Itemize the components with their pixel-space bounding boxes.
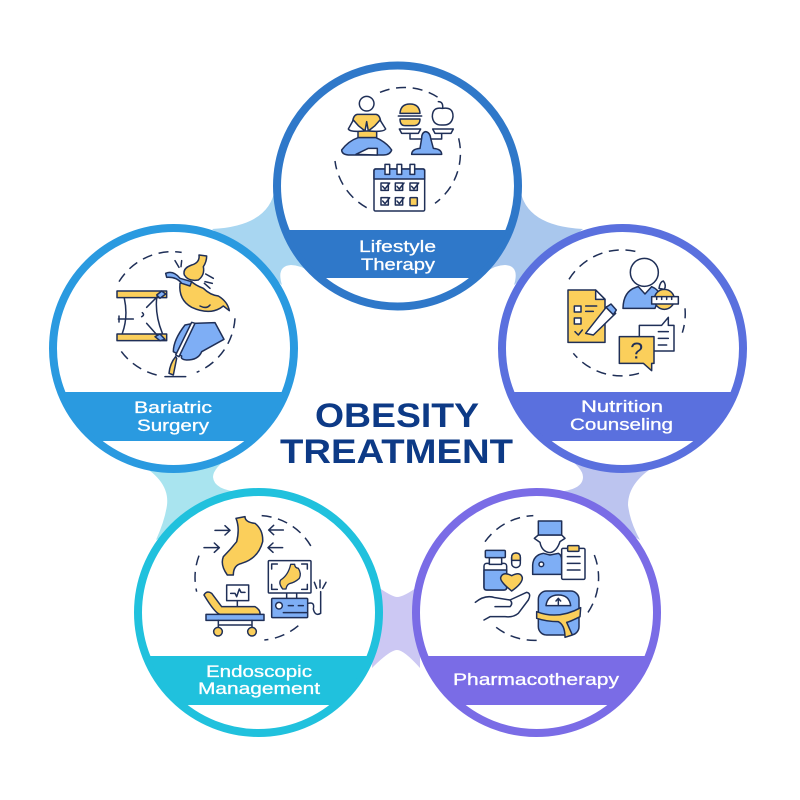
label band: [428, 656, 644, 705]
label: Lifestyle: [359, 238, 436, 256]
connector: lifestyle to bariatric: [212, 188, 310, 285]
icon: endoscopy: [195, 516, 326, 640]
icon: counseling: ?: [630, 337, 643, 363]
label: Endoscopic: [206, 663, 312, 681]
title: OBESITY: [315, 397, 479, 435]
label band: [66, 392, 282, 441]
title: [280, 397, 513, 471]
icon: pharmacy: [475, 516, 599, 640]
label: Therapy: [361, 256, 436, 274]
connector: nutrition to pharmacotherapy: [556, 455, 662, 540]
label: [198, 663, 321, 698]
label: Nutrition: [581, 398, 663, 416]
icon: surgery: [117, 252, 235, 377]
label: Pharmacotherapy: [453, 671, 620, 689]
circle: [277, 66, 518, 306]
panel: lifestyle therapy: [270, 66, 530, 306]
label: Bariatric: [134, 399, 212, 417]
label: [359, 238, 436, 274]
icon: counseling: [568, 250, 685, 376]
panel: nutrition counseling: [495, 228, 755, 469]
connector: lifestyle to nutrition: [486, 188, 583, 285]
panel: pharmacotherapy: [408, 492, 668, 733]
label: Counseling: [570, 416, 673, 434]
label: [570, 398, 673, 434]
circle: [416, 492, 657, 733]
label band: [290, 230, 506, 278]
circle: [138, 492, 379, 733]
circle: [502, 228, 743, 469]
icon: lifestyle: [335, 87, 460, 211]
label: Surgery: [137, 417, 210, 435]
connector: bariatric to endoscopic: [136, 455, 240, 540]
label: [134, 399, 212, 435]
label: Management: [198, 680, 321, 698]
label band: [150, 656, 366, 705]
circle: [53, 228, 294, 469]
panel: bariatric surgery: [45, 228, 305, 469]
connector: endoscopic to pharmacotherapy: [372, 585, 420, 668]
panel: endoscopic management: [130, 492, 390, 733]
title: TREATMENT: [280, 433, 513, 471]
label band: [514, 392, 730, 441]
